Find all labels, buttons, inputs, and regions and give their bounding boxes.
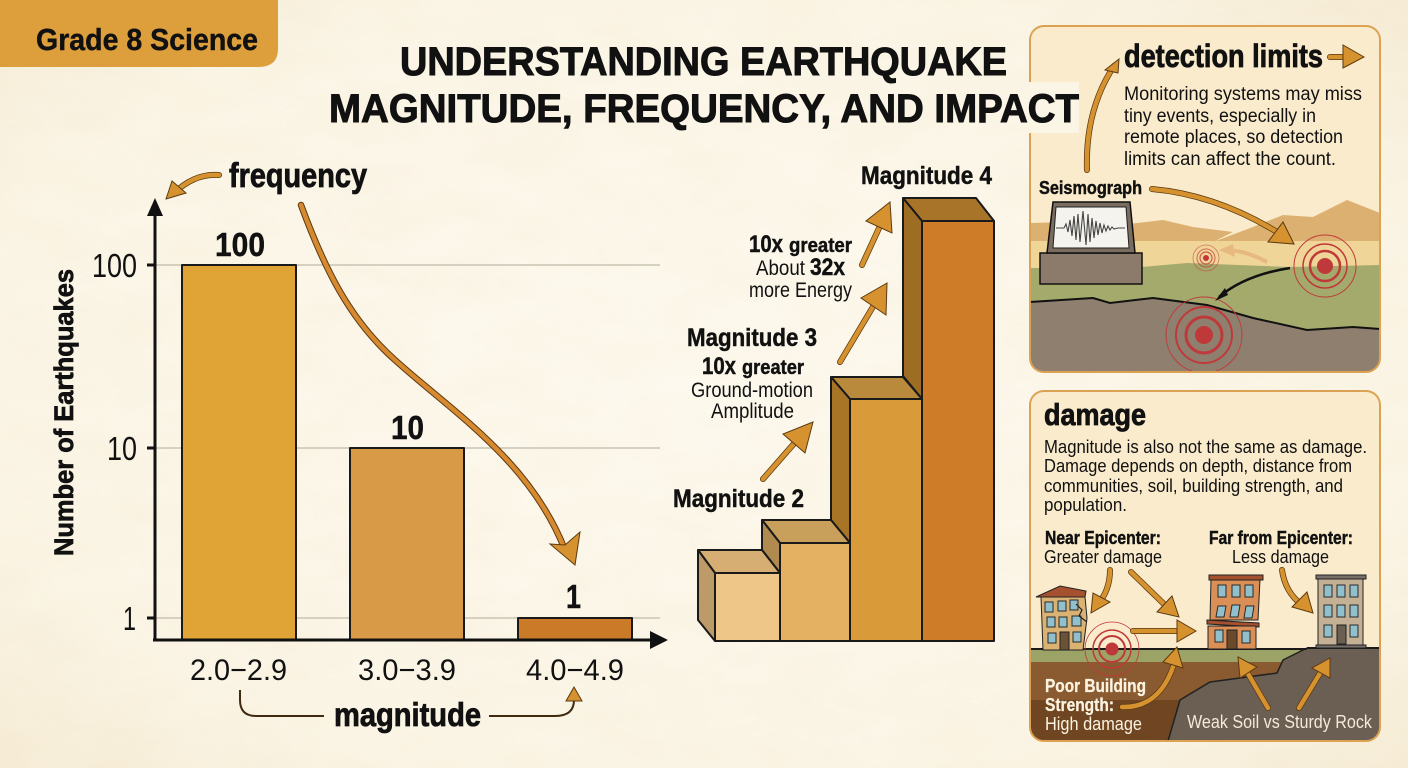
arrow: magnitude 2 to 3 [763, 422, 813, 479]
label: Magnitude 3: 10x [702, 353, 737, 380]
panel: detection limits [1030, 26, 1380, 373]
text: detection description: tiny events, especially in [1124, 106, 1316, 127]
bar: 4.0-4.9 [518, 618, 632, 640]
text: damage description: communities, soil, building strength, and [1044, 476, 1343, 496]
panel: damage [1030, 391, 1380, 741]
bar value labels: 10 [391, 409, 424, 446]
heading: damage: damage [1044, 397, 1146, 432]
building: cracked near epicenter [1036, 586, 1087, 650]
label: far from epicenter: Less damage [1232, 547, 1329, 567]
label: Magnitude 3: greater [742, 357, 804, 379]
landscape scene [1030, 200, 1380, 373]
label: Magnitude 3 [687, 324, 817, 423]
text: detection description: limits can affect the count. [1124, 149, 1336, 170]
label: 32x energy: About [756, 257, 805, 280]
title backing [1029, 82, 1079, 133]
label: Magnitude 3: Ground-motion [691, 379, 813, 402]
arrow: greater damage to middle building [1131, 572, 1179, 617]
bar value labels [215, 226, 581, 615]
arrow: up to heading [1087, 59, 1119, 170]
label: poor building strength: Strength: [1045, 695, 1114, 715]
y-axis tick labels [92, 247, 137, 637]
x-axis labels: 3.0−3.9 [358, 654, 456, 687]
text: damage description: Damage depends on depth, distance from [1044, 456, 1352, 476]
label: 32x energy [749, 231, 852, 302]
step: magnitude 4 [903, 198, 994, 641]
x-axis labels: 2.0−2.9 [190, 654, 287, 687]
y-axis tick labels: 1 [123, 600, 136, 637]
text: damage description [1044, 437, 1367, 515]
building: sturdy far [1316, 575, 1366, 648]
axes [147, 198, 668, 649]
label: near epicenter [1044, 528, 1162, 567]
bar value labels: 100 [215, 226, 265, 263]
arrow: magnitude 3 to 4 lower [840, 283, 887, 362]
bar chart: frequency by magnitude [49, 198, 668, 687]
panel border [1030, 391, 1380, 741]
badge: Grade 8 Science: Grade 8 Science [36, 22, 258, 57]
step: magnitude 2 upper [762, 520, 850, 641]
target: lower epicenter [1166, 297, 1242, 373]
arrow: seismograph to epicenter [1152, 189, 1294, 244]
label: Magnitude 3: Amplitude [711, 400, 794, 423]
arrow: less damage to far building [1282, 570, 1313, 613]
bar value labels: 1 [566, 578, 581, 615]
arrow: faded toward tiny event [1219, 244, 1267, 262]
badge: Grade 8 Science [0, 0, 278, 67]
ground scene [1030, 648, 1380, 741]
label: 32x energy: 10x [749, 231, 784, 258]
target: right epicenter [1294, 235, 1356, 297]
arrow: frequency to y axis [166, 175, 219, 199]
label: 32x energy: greater [789, 235, 852, 257]
label: magnitude: magnitude [334, 696, 481, 733]
bar: 3.0-3.9 [350, 448, 464, 640]
label: poor building strength: Poor Building [1045, 676, 1146, 696]
bar: 2.0-2.9 [182, 265, 296, 640]
arrow: magnitude bracket [240, 687, 582, 716]
target: epicenter [1085, 622, 1139, 676]
label: 32x energy: more Energy [749, 279, 852, 302]
label: Seismograph: Seismograph [1039, 178, 1142, 198]
building: damaged middle [1207, 575, 1263, 649]
label: Magnitude 4: Magnitude 4 [861, 162, 992, 190]
text: detection description [1124, 84, 1362, 170]
label: 32x energy: 32x [810, 254, 846, 281]
arrow: heading right [1330, 45, 1364, 68]
label: poor building strength [1045, 676, 1146, 734]
stepped 3D bars: magnitude scale [698, 198, 994, 641]
y-axis tick labels: 100 [92, 247, 137, 284]
title [329, 40, 1079, 131]
label: far from epicenter [1209, 528, 1353, 567]
heading: detection limits: detection limits [1124, 38, 1323, 74]
label: frequency: frequency [229, 157, 367, 195]
target: tiny event [1193, 245, 1219, 271]
arrow: epicenter to middle building [1133, 620, 1196, 642]
x-axis labels [190, 654, 624, 687]
x-axis labels: 4.0−4.9 [526, 654, 624, 687]
arrow: weak soil [1238, 657, 1268, 708]
gridlines [147, 265, 660, 618]
label: far from epicenter: Far from Epicenter: [1209, 528, 1353, 548]
label: near epicenter: Greater damage [1044, 547, 1162, 567]
step: magnitude 3 [831, 377, 922, 641]
icon: seismograph [1040, 202, 1142, 284]
label: near epicenter: Near Epicenter: [1045, 528, 1161, 548]
label: weak soil vs sturdy rock: Weak Soil vs Sturdy Rock [1187, 712, 1373, 732]
text: damage description: Magnitude is also not the same as damage. [1044, 437, 1367, 457]
arrow: poor strength to middle building [1122, 647, 1183, 707]
step: magnitude 2 lower [698, 550, 780, 641]
text: detection description: Monitoring systems may miss [1124, 84, 1362, 105]
title: MAGNITUDE, FREQUENCY, AND IMPACT [329, 87, 1079, 131]
label: Magnitude 3: Magnitude 3 [687, 324, 817, 352]
text: detection description: remote places, so detection [1124, 127, 1343, 148]
y-axis title: Number of Earthquakes [49, 269, 79, 556]
title: UNDERSTANDING EARTHQUAKE [400, 40, 1007, 84]
arrow: magnitude 3 to 4 upper [862, 202, 892, 265]
label: Magnitude 2: Magnitude 2 [673, 485, 804, 513]
text: damage description: population. [1044, 495, 1127, 515]
panel border [1030, 26, 1380, 372]
label: poor building strength: High damage [1045, 714, 1142, 734]
y-axis tick labels: 10 [107, 430, 137, 467]
arrow: black toward lower epicenter [1215, 268, 1290, 301]
arrow: sturdy rock [1299, 658, 1330, 708]
arrow: greater damage to cracked building [1091, 570, 1110, 613]
arrow: decreasing frequency curve [301, 205, 580, 565]
